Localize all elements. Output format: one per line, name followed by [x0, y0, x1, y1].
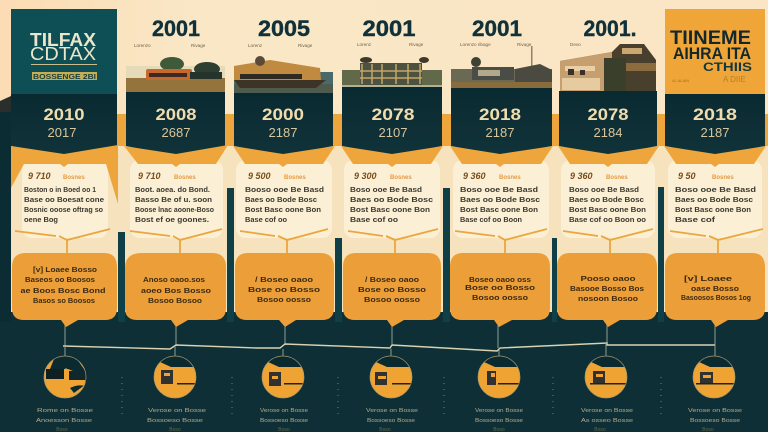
- photo labels: Rivage: [517, 42, 532, 47]
- card 5 text: Baes oo Bode Bosc: [460, 195, 540, 204]
- date blocks: 2018: [693, 105, 737, 124]
- orange panel text: Bosoo oosso: [364, 295, 421, 304]
- year headings: 2001.: [584, 16, 636, 41]
- card 1 text: Bosnic ooose oftrag so: [24, 205, 104, 214]
- dotted separators: [122, 377, 661, 417]
- card 7 text: Bost Basc oone Bon: [675, 205, 751, 214]
- orange panel text: Basos so Boosos: [33, 296, 95, 305]
- photo labels: Rivage: [298, 43, 313, 48]
- orange panel text: oase Bosso: [691, 284, 740, 293]
- title panel: right: AIHRA ITA: [673, 44, 751, 63]
- orange panel text: Bosoo oosso: [257, 295, 312, 304]
- card backgrounds: [11, 146, 768, 312]
- date blocks: 2187: [701, 125, 729, 140]
- date blocks: 2184: [594, 125, 622, 140]
- title panel: right: AL ALAIN: [672, 78, 689, 83]
- orange panel text: Pooso oaoo: [580, 274, 636, 283]
- date blocks: 2187: [486, 125, 514, 140]
- orange panel text: aoeo Bos Bosso: [141, 286, 212, 295]
- date blocks: 2107: [379, 125, 407, 140]
- card 1 text: oene Bog: [24, 215, 58, 224]
- photo: depot on plain: [451, 46, 552, 88]
- timeline captions: Bossoeso Bosse: [690, 418, 740, 424]
- title panel: BOSSENGE 2BI: [33, 74, 96, 81]
- card 3 text: Base cof oo: [245, 215, 288, 224]
- card 4 text: Bost Basc oone Bon: [350, 205, 430, 214]
- orange panel text: Bose oo Bosso: [465, 283, 536, 292]
- orange panel text: Boseo oaoo oss: [469, 275, 531, 284]
- year headings: 2001: [362, 16, 416, 41]
- orange panel text: [v] Loaee: [684, 274, 732, 283]
- gaps between cards: [118, 187, 664, 322]
- timeline captions: Verose on Bosse: [148, 408, 206, 414]
- orange panel text: Bose oo Bosso: [248, 285, 321, 294]
- orange panel text: Bose oo Bosso: [358, 285, 427, 294]
- photo: low building with trees: [126, 57, 225, 93]
- timeline captions: [36, 408, 742, 432]
- orange panels: [12, 253, 765, 327]
- date blocks: 2008: [156, 105, 196, 124]
- photo labels: Lorenzo ribage: [460, 42, 491, 47]
- date blocks: 2078: [372, 105, 414, 124]
- timeline captions: Verose on Bosse: [688, 408, 742, 414]
- timeline captions: As osseo Bosse: [581, 418, 633, 424]
- date blocks: 2018: [479, 105, 521, 124]
- orange panel text: / Boseo oaoo: [365, 275, 420, 284]
- inner card panels: [22, 160, 762, 238]
- title panel: right: [665, 9, 765, 94]
- date blocks: 2078: [588, 105, 628, 124]
- timeline captions: Verose on Bosse: [260, 408, 308, 414]
- card 4 text: 9 300: [354, 171, 377, 181]
- year headings: 2005: [258, 16, 310, 41]
- orange panel text: ae Boos Bosc Bond: [20, 286, 106, 295]
- card 1 text: 9 710: [28, 171, 51, 181]
- card 4 text: [350, 171, 433, 224]
- card 2 text: Boose lnac aoone-Boso: [135, 205, 215, 214]
- card 5 text: Boso ooe Be Basd: [460, 185, 538, 194]
- card 5 text: Bosnes: [499, 175, 521, 181]
- title panel: TILFAX: [30, 30, 96, 50]
- date blocks: 2000: [262, 105, 304, 124]
- photo: apartment block: [342, 57, 442, 87]
- card 6 text: 9 360: [570, 171, 593, 181]
- timeline captions: Bossoeso Bosse: [147, 418, 203, 424]
- card 7 text: Boso ooe Be Basd: [675, 185, 756, 194]
- date blocks: [11, 87, 765, 156]
- card 1 text: Bosnes: [63, 175, 85, 181]
- card 6 text: [569, 171, 647, 224]
- card 6 text: Boso ooe Be Basd: [569, 185, 639, 194]
- connector lines: [63, 325, 715, 356]
- timeline captions: Rome on Bosse: [37, 408, 93, 414]
- photo labels: Lorenz: [357, 42, 372, 47]
- year headings: 2001: [152, 16, 200, 41]
- orange panel text: Bosoo oosso: [472, 293, 529, 302]
- card 2 text: [135, 171, 215, 224]
- photo: ship on water: [234, 56, 333, 93]
- card 6 text: Base cof oo Boon oo: [569, 215, 647, 224]
- card 6 text: Baes oo Bode Bosc: [569, 195, 644, 204]
- card 5 text: 9 360: [463, 171, 486, 181]
- title panel: [11, 9, 117, 94]
- title panel: CDTAX: [30, 44, 96, 64]
- card 6 text: Bosnes: [606, 175, 628, 181]
- title panel: right: CTHIIS: [703, 60, 752, 74]
- card 1 text: Boston o in Boed oo 1: [24, 185, 96, 194]
- year headings: [152, 16, 636, 41]
- card 7 text: Baes oo Bode Bosc: [675, 195, 753, 204]
- card 3 text: Booso ooe Be Basd: [245, 185, 324, 194]
- card 5 text: Bost Basc oone Bon: [460, 205, 538, 214]
- card 3 text: [245, 171, 324, 224]
- date blocks: 2010: [44, 105, 84, 124]
- card 6 text: Bost Basc oone Bon: [569, 205, 646, 214]
- timeline captions: Verose on Bosse: [475, 408, 523, 414]
- card 1 text: Base oo Boesat cone: [24, 195, 104, 204]
- orange panel text: [20, 265, 751, 305]
- card 2 text: Bost ef oe goones.: [135, 215, 209, 224]
- timeline captions: Bossoeso Bosse: [475, 418, 523, 424]
- card 2 text: Basso Be of u. soon: [135, 195, 212, 204]
- card 4 text: Base cof oo: [350, 215, 399, 224]
- card 4 text: Bosnes: [390, 175, 412, 181]
- card 3 text: Bosnes: [284, 175, 306, 181]
- orange panel text: Anoso oaoo.sos: [143, 275, 205, 284]
- card 7 text: 9 50: [678, 171, 696, 181]
- date blocks: 2017: [48, 125, 76, 140]
- timeline captions: Verose on Bosse: [366, 408, 418, 414]
- card 3 text: Baes oo Bode Bosc: [245, 195, 317, 204]
- orange panel text: nosoon Bosoo: [578, 294, 639, 303]
- photo labels: Lorenzo: [134, 43, 151, 48]
- year headings: 2001: [472, 16, 522, 41]
- timeline captions: Verose on Bosse: [581, 408, 633, 414]
- card 5 text: [460, 171, 540, 224]
- title panel: right: A DIIE: [723, 75, 746, 84]
- timeline captions: Bossoeso Bosse: [260, 418, 308, 424]
- card 4 text: Boso ooe Be Basd: [350, 185, 422, 194]
- photo labels: Devo: [570, 42, 581, 47]
- card 2 text: Bosnes: [174, 175, 196, 181]
- card chevrons: [15, 229, 763, 253]
- orange panel text: [v] Loaee Bosso: [33, 265, 98, 274]
- card 2 text: 9 710: [138, 171, 161, 181]
- timeline captions: Bossoeso Bosse: [367, 418, 415, 424]
- photo labels: Rivage: [191, 43, 206, 48]
- photo: large building: [560, 44, 656, 91]
- card 7 text: Base cof: [675, 215, 716, 224]
- photo labels: Lorenz: [248, 43, 263, 48]
- card 5 text: Base cof oo Boon: [460, 215, 522, 224]
- date blocks: 2687: [162, 125, 190, 140]
- card 7 text: [675, 171, 756, 224]
- card 3 text: Bost Basc oone Bon: [245, 205, 321, 214]
- orange panel text: Basooe Bosso Bos: [570, 284, 644, 293]
- card 3 text: 9 500: [248, 171, 271, 181]
- date blocks: 2187: [269, 125, 297, 140]
- timeline icons: [44, 356, 735, 398]
- title panel: right: TIINEME: [670, 28, 751, 49]
- photo labels: Rivage: [409, 42, 424, 47]
- photo labels: [134, 42, 581, 48]
- card 1 text: [24, 171, 104, 224]
- card 7 text: Bosnes: [712, 175, 734, 181]
- card folds: [11, 145, 766, 204]
- card 2 text: Boot. aoea. do Bond.: [135, 185, 210, 194]
- card 4 text: Baes oo Bode Bosc: [350, 195, 433, 204]
- orange panel text: Baseos oo Boosos: [25, 275, 95, 284]
- orange panel text: / Boseo oaoo: [255, 275, 314, 284]
- timeline captions: Anoesson Bosse: [36, 418, 92, 424]
- orange panel text: Bosoo Bosoo: [148, 296, 203, 305]
- orange panel text: Basoosos Bosos 1og: [681, 293, 751, 302]
